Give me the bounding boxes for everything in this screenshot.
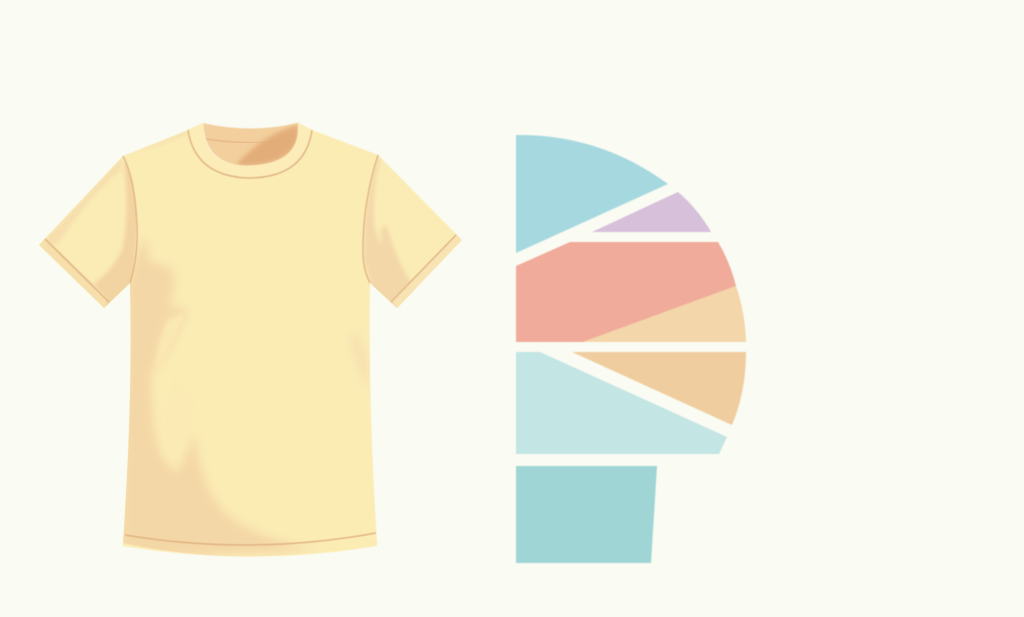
right sleeve <box>363 155 462 312</box>
body shading <box>120 130 385 560</box>
segment: purple <box>592 192 711 232</box>
segment: sand <box>583 286 746 342</box>
segment: teal block <box>516 466 657 563</box>
shirt inner neck <box>203 123 299 166</box>
t-shirt <box>39 123 462 560</box>
segment: coral <box>516 242 736 342</box>
stitching <box>45 130 456 545</box>
segmented semicircle chart <box>516 135 746 563</box>
segment: blue <box>516 135 668 253</box>
left sleeve <box>39 156 142 310</box>
illustration canvas <box>38 122 746 564</box>
shirt body <box>45 123 456 560</box>
collar band <box>188 123 312 178</box>
segment: light teal <box>516 352 727 454</box>
segment: orange <box>572 352 746 425</box>
